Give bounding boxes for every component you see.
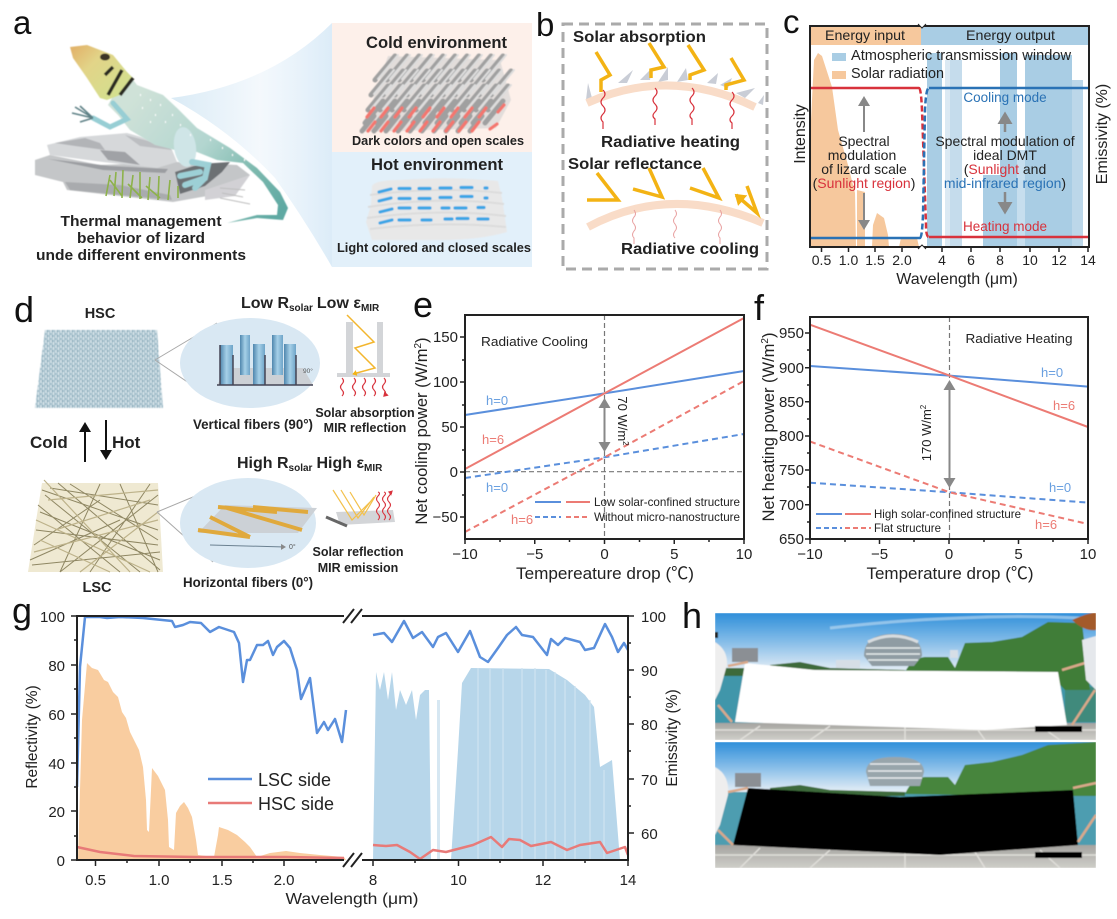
panel b: radiative heating and cooling <box>536 6 767 269</box>
axes: −10 <box>797 546 823 563</box>
h labels: h=6 <box>482 432 504 447</box>
axes: 60 <box>641 826 658 843</box>
legend: Without micro-nanostructure <box>594 510 740 524</box>
label f: f <box>754 287 765 328</box>
scale arc: absorbing <box>586 43 764 129</box>
h labels: h=6 <box>1053 398 1075 413</box>
axes: 90 <box>641 663 658 680</box>
hind leg <box>171 126 199 168</box>
axes: 40 <box>48 756 65 773</box>
legend <box>816 507 1021 535</box>
h labels: h=0 <box>486 480 508 495</box>
bubble: vertical fibers: 90° <box>303 367 313 375</box>
axes: 100 <box>40 609 65 626</box>
label: 70 W/m2: 2 <box>621 441 630 446</box>
panel c: spectral modulation <box>783 3 1111 288</box>
axes: 2.0 <box>892 252 912 268</box>
illustration: lizard <box>70 45 288 223</box>
heading: low state: Low R <box>241 295 289 312</box>
zoom lines <box>155 323 217 562</box>
axes: 0 <box>945 546 953 563</box>
axes: 10 <box>736 546 752 563</box>
axes: Temperature drop (℃) <box>866 564 1034 583</box>
text: ideal DMT modulation: (Sunlight and <box>964 161 1046 177</box>
solar spectrum fill <box>810 53 919 247</box>
caption: lizard behaviour: unde different environments <box>36 247 246 264</box>
axes: −5 <box>526 546 543 563</box>
axes: 10 <box>1080 546 1096 563</box>
axes: Intensity <box>792 104 809 164</box>
axes: Reflectivity (%) <box>24 685 41 789</box>
axes: 12 <box>1051 252 1067 268</box>
axes: 0 <box>600 546 609 563</box>
axes: 4 <box>938 252 946 268</box>
LSC curve <box>77 617 628 787</box>
legend: Atmospheric transmission window <box>851 48 1072 64</box>
header bands <box>810 26 1089 45</box>
mode labels: Cooling mode <box>963 90 1047 105</box>
caption: vertical fibers: Vertical fibers (90°) <box>193 416 313 432</box>
collar bands <box>105 67 133 95</box>
zoom wedge <box>171 23 332 267</box>
front leg <box>93 103 127 127</box>
legend: Low solar-confined structure <box>594 495 740 509</box>
panel a: lizard thermal management <box>13 4 532 267</box>
legend: High solar-confined structure <box>874 507 1021 521</box>
axes: −10 <box>452 546 478 563</box>
axes: 8 <box>369 872 377 889</box>
caption: solar reflection: Solar reflection <box>312 545 404 559</box>
label b: b <box>536 6 554 43</box>
legend: LSC side <box>258 770 331 790</box>
label g: g <box>12 590 32 631</box>
text: ideal DMT modulation: mid-infrared region) <box>944 175 1066 191</box>
legend: HSC side <box>258 794 334 814</box>
header bands: Energy input <box>825 27 905 43</box>
legend <box>208 770 334 814</box>
photo: white side <box>715 613 1096 740</box>
axes: 5 <box>1014 546 1023 563</box>
bubble: vertical fibers <box>180 318 320 408</box>
eye <box>100 54 110 60</box>
caption: solar reflection: MIR emission <box>318 561 398 575</box>
panel e: net cooling power chart <box>413 284 752 583</box>
illustration: rock <box>35 133 250 204</box>
heading: solar reflectance: Solar reflectance <box>568 156 702 173</box>
legend <box>832 48 1072 82</box>
label Hot with arrow <box>106 420 141 458</box>
axes: 1.0 <box>839 252 858 268</box>
axes: 70 <box>641 772 658 789</box>
body and tail <box>108 72 288 223</box>
h labels: h=6 <box>511 512 533 527</box>
data lines <box>465 318 744 532</box>
bubble: horizontal fibers: 0° <box>289 543 296 551</box>
heading: low state: Low ε <box>317 295 361 312</box>
mode labels: Heating mode <box>963 219 1047 234</box>
HSC curve <box>77 837 628 859</box>
axes: Wavelength (μm) <box>286 891 418 908</box>
text: lizard scale modulation: (Sunlight region) <box>813 175 915 191</box>
panel h: photographs <box>682 595 1096 868</box>
axes: 2.0 <box>274 872 294 889</box>
legend <box>535 495 740 524</box>
arrow: 170 W/m2 gap <box>948 382 950 486</box>
spots <box>140 95 245 160</box>
box: hot environment <box>332 152 532 267</box>
mat: LSC <box>28 480 163 572</box>
axes: 0 <box>450 464 458 481</box>
label d: d <box>14 289 34 330</box>
h labels: h=0 <box>1049 480 1071 495</box>
panel f: net heating power chart <box>754 287 1096 583</box>
axes <box>792 24 1111 288</box>
axes: 1.5 <box>865 252 885 268</box>
axes: −50 <box>433 509 458 526</box>
caption: light colored: Light colored and closed scales <box>337 240 531 255</box>
axes: Emissivity (%) <box>1094 84 1111 184</box>
axes: −5 <box>871 546 888 563</box>
axes: 900 <box>779 360 804 377</box>
axes: 12 <box>535 872 551 889</box>
axes: ) <box>413 337 431 343</box>
axes: 2 <box>413 342 424 348</box>
photo: black side <box>715 742 1096 868</box>
axes: Emissivity (%) <box>664 689 681 787</box>
caption: lizard behaviour: Thermal management <box>60 213 222 230</box>
axes: 5 <box>670 546 678 563</box>
data lines <box>810 325 1088 524</box>
axes: 100 <box>641 609 666 626</box>
axes: 0.5 <box>85 872 106 889</box>
caption: solar absorption: MIR reflection <box>324 421 406 435</box>
axes: 50 <box>441 419 458 436</box>
mode lines <box>810 88 1089 238</box>
label Cold with arrow <box>30 424 85 462</box>
label HSC: HSC <box>85 306 116 322</box>
text: lizard scale modulation: of lizard scale <box>821 161 907 177</box>
mode labels <box>963 90 1047 234</box>
axes: 100 <box>433 374 458 391</box>
axes <box>24 609 681 908</box>
axes: 20 <box>48 804 65 821</box>
icon: absorption trapping <box>337 315 390 396</box>
scales: dark open <box>362 55 514 132</box>
axes: 950 <box>779 325 804 342</box>
axes: Tempereature drop (℃) <box>516 564 694 583</box>
axes: 1.5 <box>212 872 232 889</box>
caption: horizontal fibers: Horizontal fibers (0°) <box>183 574 313 590</box>
axes: Net cooling power (W/m <box>413 348 431 525</box>
heading: radiative heating: Radiative heating <box>601 134 740 151</box>
h labels <box>1035 365 1075 532</box>
reference lines <box>465 315 744 539</box>
text: lizard scale modulation: Spectral <box>838 133 890 149</box>
illustration: grass <box>106 170 178 200</box>
label c: c <box>783 3 800 40</box>
axes <box>760 317 1096 583</box>
axes: 2 <box>760 338 771 344</box>
axes: 14 <box>1080 252 1096 268</box>
heading: low state: solar <box>289 303 313 314</box>
text: ideal DMT modulation: ideal DMT <box>973 147 1037 163</box>
label LSC: LSC <box>82 580 112 596</box>
axes: 700 <box>779 497 804 514</box>
axes <box>413 315 752 583</box>
atmospheric window fill <box>373 668 620 860</box>
axes: 14 <box>620 872 636 889</box>
box: cold environment <box>332 23 532 152</box>
mat: HSC <box>35 330 163 408</box>
waves: thermal <box>601 88 734 129</box>
axes: 650 <box>779 531 804 548</box>
panel g: reflectivity and emissivity chart <box>12 590 681 908</box>
panel d: switchable fibers <box>14 289 415 596</box>
axes: 10 <box>1022 252 1038 268</box>
arrows: solar in <box>596 43 744 92</box>
dashed frame <box>563 24 767 269</box>
axes: 0 <box>57 853 65 870</box>
legend: Flat structure <box>874 521 941 535</box>
scale arc: reflecting <box>587 168 763 244</box>
label: 70 W/m2: 70 W/m <box>615 396 630 441</box>
axes: 150 <box>433 329 458 346</box>
heading: hot: Hot environment <box>371 155 503 174</box>
caption: dark colors: Dark colors and open scales <box>352 133 524 148</box>
legend: Solar radiation <box>851 66 944 82</box>
heading: radiative cooling: Radiative cooling <box>621 241 759 258</box>
axes: 1.0 <box>149 872 169 889</box>
heading: high state: High R <box>237 455 289 472</box>
bubble: horizontal fibers <box>180 478 317 568</box>
arrow: 70 W/m2 gap <box>604 400 606 450</box>
axes: ) <box>760 333 778 338</box>
label: 170 W/m2: 2 <box>919 404 928 409</box>
arrows: modulation <box>864 98 1005 228</box>
heading: cold: Cold environment <box>366 33 507 52</box>
axes: 10 <box>450 872 467 889</box>
caption: lizard behaviour: behavior of lizard <box>77 230 205 247</box>
axes: 0.5 <box>812 252 831 268</box>
label e: e <box>413 284 433 325</box>
label: 170 W/m2: 170 W/m <box>919 409 934 461</box>
axes: 60 <box>48 707 65 724</box>
axes: 80 <box>641 717 658 734</box>
axes: 800 <box>779 428 804 445</box>
head <box>70 45 133 100</box>
label h: h <box>682 595 702 636</box>
heading: high state: MIR <box>364 463 383 474</box>
axes: 750 <box>779 462 804 479</box>
label Hot with arrow: Hot <box>112 433 141 452</box>
axes: 8 <box>996 252 1004 268</box>
heading: solar absorption: Solar absorption <box>573 29 706 46</box>
heading: high state: High ε <box>316 455 364 472</box>
text: lizard scale modulation: modulation <box>828 147 896 163</box>
reference line <box>948 317 950 539</box>
h labels <box>482 393 533 527</box>
h labels: h=6 <box>1035 517 1057 532</box>
chart title: Radiative Cooling <box>481 334 588 349</box>
axes: 80 <box>48 658 65 675</box>
heading: high state: solar <box>289 463 313 474</box>
axes: 6 <box>967 252 975 268</box>
text: ideal DMT modulation: Spectral modulation of <box>935 133 1075 149</box>
label a: a <box>13 4 32 41</box>
caption: solar absorption: Solar absorption <box>315 406 415 420</box>
label Cold with arrow: Cold <box>30 433 68 452</box>
h labels: h=0 <box>1041 365 1063 380</box>
header bands: Energy output <box>966 27 1055 43</box>
scales: light closed <box>366 178 507 240</box>
axes: Net heating power (W/m <box>760 344 778 521</box>
heading: low state: MIR <box>361 303 380 314</box>
axes: 850 <box>779 394 804 411</box>
icon: reflection emission <box>326 490 395 526</box>
axes: Wavelength (μm) <box>896 271 1018 288</box>
waves: weak thermal <box>632 210 722 244</box>
solar spectrum fill <box>78 663 346 860</box>
chart title: Radiative Heating <box>966 331 1072 346</box>
atmospheric window fill <box>927 53 1083 247</box>
h labels: h=0 <box>486 393 508 408</box>
arrows: solar reflected <box>587 168 757 213</box>
